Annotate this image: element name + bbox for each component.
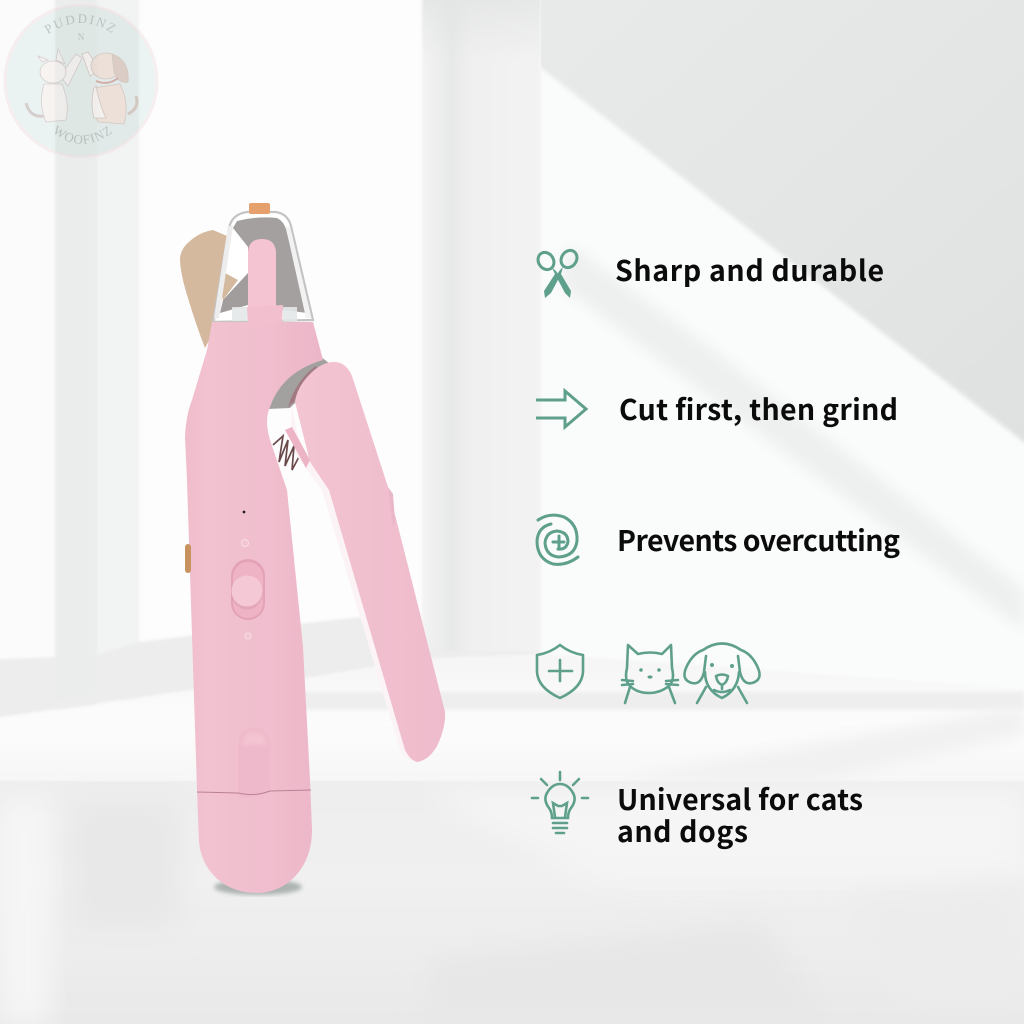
watermark lettering: WOOFINZ: [55, 125, 112, 144]
seam and hook: [197, 728, 311, 798]
main body: [185, 322, 323, 893]
pillar showing through the badge: [55, 0, 139, 160]
moving lever handle: [285, 362, 445, 762]
watermark logo badge: [4, 5, 158, 157]
steel blade: [233, 217, 307, 313]
watermark lettering: N: [78, 32, 85, 42]
icon: dog face: [684, 644, 760, 703]
watermark lettering: [44, 14, 116, 144]
floor light patches: [0, 800, 50, 1024]
product: pink pet nail clipper with grinder: [180, 203, 445, 895]
spring: [273, 436, 300, 470]
label: Cut first, then grind: [619, 388, 898, 429]
label: two lines: Universal for cats: [617, 778, 863, 819]
label: Prevents overcutting: [617, 519, 900, 560]
feature row: sharp and durable: [535, 247, 884, 298]
file tip seen through guard: [220, 273, 238, 300]
lower curved blade: [268, 356, 330, 409]
feature row: universal for cats and dogs: [532, 772, 863, 851]
guard clasp band: [232, 305, 297, 326]
icon: scissors: [535, 247, 580, 298]
indicator dots: [242, 511, 251, 639]
right wall in sunlight: [540, 0, 1024, 720]
lever grip ridges: [388, 487, 395, 528]
white lever underside: [291, 405, 414, 761]
icon: cat face: [622, 645, 678, 703]
blurred room structure: [0, 0, 1024, 790]
icon: spiral: [537, 515, 578, 564]
feature row: protection and pet icons: [537, 644, 760, 703]
wall pillar: [422, 0, 541, 660]
feature row: cut first, then grind: [536, 388, 898, 429]
guard post: [248, 239, 276, 316]
marble floor: [0, 781, 1024, 1024]
cat eyes and nose: [639, 668, 661, 679]
dog eyes: [710, 663, 734, 668]
wall shadow diagonal: [541, 0, 1024, 444]
centre window: [139, 0, 422, 642]
label: Sharp and durable: [615, 249, 884, 290]
faint sunlight bar shadow: [560, 245, 1024, 630]
watermark lettering: PUDDINZ: [44, 14, 116, 34]
window frame pillar: [55, 0, 97, 710]
icon: shield with plus: [537, 645, 583, 698]
left window: [0, 0, 55, 660]
lower floor highlight: [0, 654, 1024, 790]
label: two lines: [617, 778, 863, 851]
emery grinding file: [180, 230, 227, 348]
icon: light bulb: [532, 772, 588, 833]
watermark dog: [82, 52, 137, 124]
lever spring tab: [285, 427, 310, 468]
label: two lines: and dogs: [617, 810, 748, 851]
guard orange tab: [249, 203, 270, 214]
transparent nail guard: [213, 203, 313, 322]
side orange button: [185, 544, 191, 573]
slider switch: [231, 559, 265, 620]
icon: arrow: [536, 391, 586, 427]
floor contact shadow: [214, 879, 302, 895]
floor back band: [300, 692, 1024, 710]
watermark cat: [26, 49, 82, 122]
feature row: prevents overcutting: [537, 515, 900, 564]
window sill skirting: [0, 617, 540, 720]
